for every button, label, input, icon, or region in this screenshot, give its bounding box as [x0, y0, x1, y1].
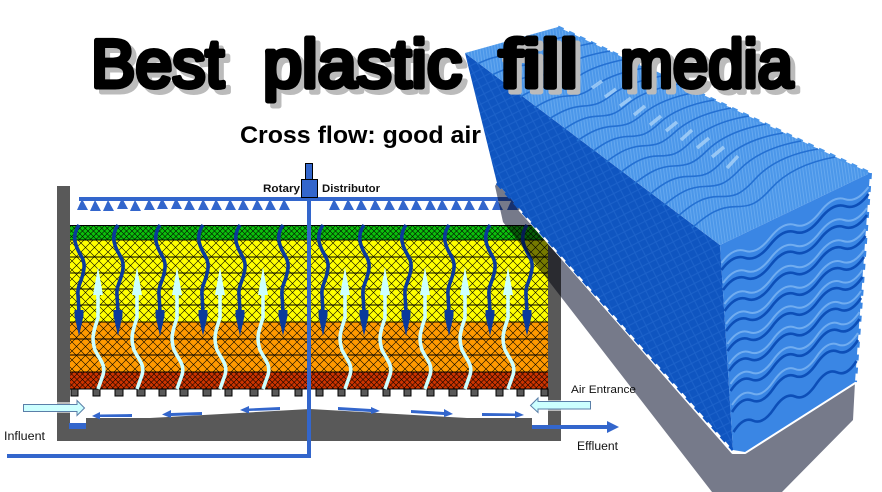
rotary distributor arm and nozzles: [77, 197, 531, 211]
light ridge highlights: [592, 81, 738, 168]
tank floor and walls: [57, 186, 561, 441]
title: media: [620, 26, 793, 102]
filter media layers: [70, 225, 548, 389]
top face with corrugated sheets: [465, 27, 870, 245]
air flow wavy arrows: [93, 267, 514, 389]
diagram: trickling filter cross-section: [4, 164, 636, 456]
plastic fill block shadow base: [495, 183, 855, 492]
air inlet arrow right: [530, 398, 590, 412]
distributor head: [302, 164, 318, 198]
left collection channel: [69, 423, 86, 429]
label: Effluent: Effluent: [577, 441, 619, 453]
subtitle: Cross flow: good air: [240, 122, 481, 149]
title: plastic: [263, 26, 462, 102]
title: fill: [499, 26, 578, 102]
title: Best: [91, 26, 224, 102]
label: Influent: Influent: [4, 431, 46, 443]
influent pipe: [7, 197, 309, 456]
plastic fill media block: [465, 27, 870, 452]
label: Distributor: Distributor: [322, 183, 381, 195]
front face with ripples: [720, 173, 870, 452]
title: [91, 26, 793, 102]
white edge gap: [520, 209, 855, 452]
label: Air Entrance: Air Entrance: [571, 384, 636, 396]
dark side face: [465, 53, 733, 450]
air inlet arrow left: [24, 400, 84, 416]
floor flow arrows: [92, 406, 524, 420]
water flow wavy arrows: [74, 225, 532, 336]
underdrain blocks: [71, 389, 548, 396]
effluent arrow: [532, 421, 619, 433]
label: Rotary: Rotary: [263, 183, 301, 195]
